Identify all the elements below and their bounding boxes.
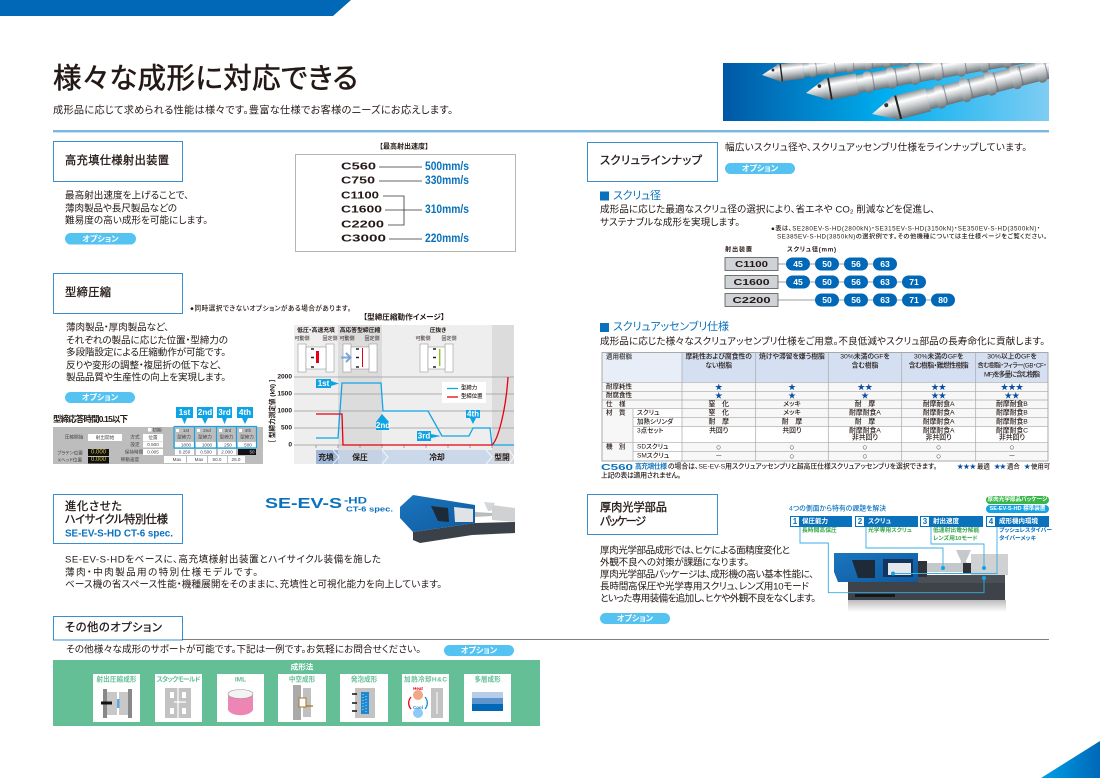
axis labels: 1000	[277, 408, 292, 414]
text: screw diameter description	[600, 204, 935, 228]
phase bar: 保圧	[352, 452, 368, 462]
card: hollow molding	[278, 674, 326, 722]
phase bar: 型開	[494, 452, 510, 462]
diameter chart: 射出装置	[725, 246, 752, 254]
chart: max injection speed: C750	[341, 176, 376, 186]
table: screw assembly specs: ★	[715, 391, 723, 400]
diagrams: mold states	[294, 326, 457, 372]
chart: max injection speed: C560	[341, 162, 377, 172]
text: lineup description: 幅広いスクリュ径や、スクリュアッセンブリ仕様をラインナップしています。	[725, 142, 1027, 154]
control panel screen: 移動速度	[121, 456, 140, 463]
package diagram: 1	[793, 517, 798, 526]
chart: max injection speed: 【最高射出速度】	[380, 142, 428, 150]
diameter chart: スクリュ径(mm)	[787, 246, 836, 254]
text: high filling description: 難易度の高い成形を可能にします。	[65, 214, 208, 226]
heading: other options: その他のオプション	[65, 621, 162, 634]
logo: SE-EV-S-HD: CT-6 spec.	[346, 506, 393, 514]
panel: screw lineup	[588, 142, 1051, 480]
step tabs: 1st	[179, 408, 191, 417]
control panel screen: 位置	[148, 434, 158, 441]
table: screw assembly specs: －	[1008, 452, 1016, 460]
table: screw assembly specs: 摩耗性および腐食性の	[686, 352, 752, 360]
table: screw assembly specs: 耐摩耐食B	[996, 399, 1028, 408]
subheading: screw assembly: スクリュアッセンブリ仕様	[613, 319, 729, 333]
chart: max injection speed: 330mm/s	[425, 175, 469, 187]
line: mold position	[316, 377, 508, 445]
package diagram: 4つの側面から特有の課題を解決	[789, 504, 886, 512]
title: 様々な成形に対応できる	[53, 63, 358, 95]
text: high-cycle description: 薄肉・中肉製品用の特別仕様モデルです。	[65, 566, 258, 578]
card: stack mold: スタックモールド	[156, 674, 200, 684]
control panel screen: 0.000	[91, 457, 107, 463]
table: screw assembly specs: 耐摩耐食A	[923, 399, 955, 408]
table: screw assembly specs: SDスクリュ	[637, 442, 669, 450]
table: screw assembly specs: 共回り	[782, 426, 802, 434]
subtitle: 成形品に応じて求められる性能は様々です。豊富な仕様でお客様のニーズにお応えします。	[53, 104, 453, 116]
control panel screen: Max	[195, 457, 204, 462]
step tabs: 4th	[239, 408, 251, 417]
text: other options description: その他様々な成形のサポートが可能です。下記は一例です。お気軽にお問合せください。	[66, 644, 421, 656]
diagrams: mold states: 圧抜き	[430, 326, 447, 334]
table: screw assembly specs: ★	[861, 391, 869, 400]
text: assembly description: 成形品に応じた様々なスクリュアッセンブリ仕様をご用意。不良低減やスクリュ部品の長寿命化に貢献します。	[600, 336, 1045, 348]
table: screw assembly specs: ★★	[858, 382, 873, 392]
table: screw assembly specs: 非共回り	[852, 432, 878, 442]
diameter chart: 71	[909, 277, 919, 287]
note	[771, 224, 1047, 240]
table footnote: 上記の表は適用されません。	[601, 470, 681, 480]
table: screw assembly specs: 耐 摩	[855, 399, 875, 408]
phase bar: 冷却	[429, 452, 445, 462]
diameter chart: 45	[793, 259, 803, 269]
table: screw assembly specs: ○	[936, 442, 941, 452]
package diagram: 3	[923, 517, 928, 526]
control panel screen: 方式	[130, 434, 140, 440]
heading: high filling	[54, 142, 182, 182]
package diagram: プッシュレスタイバー	[999, 526, 1052, 534]
package diagram: 低速射出電分解能	[933, 526, 980, 534]
molding methods panel	[53, 660, 540, 726]
phase bar	[316, 450, 514, 464]
option pill	[444, 645, 514, 656]
package diagram: 厚肉光学部品パッケージ	[988, 495, 1048, 503]
diagrams: mold states: 固定側	[322, 335, 338, 342]
control panel screen: 1st	[183, 428, 190, 433]
table: screw assembly specs: 3点セット	[637, 426, 663, 434]
table: screw assembly specs: スクリュ	[637, 409, 660, 417]
heading: mold compression: 型締圧縮	[65, 285, 111, 299]
package diagram: 長時間高保圧	[802, 526, 837, 534]
card: injection compression	[93, 674, 140, 722]
diameter chart: 63	[880, 277, 890, 287]
legend: 型締位置	[461, 392, 483, 400]
axis labels: 1500	[277, 390, 292, 398]
table: screw assembly specs: 30%未満のGFを	[840, 352, 890, 360]
machine photo	[400, 495, 515, 543]
control panel screen: 型締力	[177, 434, 191, 440]
panel: thick optical parts	[588, 494, 1052, 624]
card: multi-layer	[464, 674, 511, 722]
diameter chart: 50	[822, 277, 832, 287]
chart: max injection speed: C1600	[341, 204, 383, 216]
diagrams: mold states: 固定側	[441, 335, 457, 342]
table: screw assembly specs: ○	[716, 442, 721, 452]
heading: high-cycle spec: ハイサイクル特別仕様	[65, 512, 168, 526]
diameter chart: 50	[822, 295, 832, 305]
axis labels	[268, 374, 292, 448]
option pill: オプション	[742, 164, 778, 173]
text: mold compression description: 薄肉製品・厚肉製品など、	[66, 322, 169, 334]
option pill: オプション	[82, 393, 118, 402]
table: screw assembly specs: ★★	[931, 391, 947, 400]
star legend: ★★★	[957, 464, 977, 470]
option pill: オプション	[82, 234, 119, 244]
table: screw assembly specs: ○	[1009, 442, 1015, 452]
line: mold force	[316, 383, 514, 445]
heading: mold compression	[54, 274, 182, 314]
control panel screen: 50.0	[213, 457, 222, 462]
package diagram: 保圧能力	[802, 516, 828, 525]
diameter chart: 63	[880, 295, 890, 305]
table: screw assembly specs: MF)を多量に含む樹脂	[984, 370, 1040, 378]
panel: mold compression	[53, 274, 514, 464]
panel: other options	[53, 616, 1049, 726]
card: heat and cool: Heat	[413, 686, 423, 691]
card: heat and cool: 加熱冷却H&C	[404, 674, 447, 684]
axis labels: 500	[281, 424, 292, 432]
text: screw diameter description: 成形品に応じた最適なスクリュ径の選択により、省エネや CO₂ 削減などを促進し、	[600, 204, 935, 216]
note: SE385EV-S-HD(3850kN)の選択例です。その他機種については主仕様ページをご覧ください。	[777, 232, 1047, 240]
table: screw assembly specs: 材 質	[606, 408, 626, 417]
package diagram: タイバーメッキ	[999, 534, 1036, 542]
text: mold compression description	[66, 322, 228, 384]
control panel screen: 500	[244, 442, 252, 448]
card: foam molding	[340, 674, 388, 722]
table: screw assembly specs: 耐摩耐食B	[996, 417, 1028, 426]
card: IML	[217, 674, 264, 722]
table: screw assembly specs: ★	[788, 382, 796, 392]
text: optical description: 厚肉光学部品成形では、ヒケによる面精度変化と	[600, 544, 790, 556]
step tabs: 2nd	[198, 408, 212, 417]
diameter chart	[725, 246, 955, 306]
star legend	[957, 462, 1051, 470]
diameter chart: 45	[793, 277, 803, 287]
table: screw assembly specs: ○	[789, 442, 795, 452]
diagrams: mold states: 固定側	[364, 335, 380, 342]
text: optical description: といった専用装備を追加し、ヒケや外観不良をなくします。	[600, 592, 816, 604]
machine	[834, 550, 1008, 612]
text: optical description: 外観不良への対策が課題になります。	[600, 556, 749, 568]
card: injection compression: 射出圧縮成形	[96, 674, 137, 684]
heading: thick optical parts	[588, 494, 718, 534]
option pill: オプション	[617, 614, 653, 623]
chart: max injection speed: 220mm/s	[425, 233, 469, 245]
step tabs: 3rd	[218, 408, 231, 417]
card: heat and cool: Cool	[413, 705, 423, 710]
card: stack mold	[155, 674, 202, 722]
heading: high filling: 高充填仕様射出装置	[65, 153, 169, 167]
control panel screen: 初期	[152, 426, 162, 434]
chart callouts: 1st	[318, 379, 330, 388]
table footnote: の場合は、SE-EV-S用スクリュアッセンブリと超高圧仕様スクリュアッセンブリを選択できます。	[668, 462, 937, 470]
text: high-cycle description: ベース機の省スペース性能・機種展開をそのままに、充填性と可視化能力を向上しています。	[65, 578, 442, 590]
table: screw assembly specs: 仕 様	[606, 399, 626, 408]
table: screw assembly specs: ○	[936, 451, 941, 461]
control panel screen: 型締力	[198, 434, 212, 440]
option pill	[600, 613, 670, 624]
package diagram: 光学専用スクリュ	[868, 526, 912, 534]
table: screw assembly specs: 30%未満のGFを	[914, 352, 964, 360]
package diagram: レンズ用10モード	[933, 534, 978, 542]
package diagram: 成形機内環境	[999, 516, 1038, 525]
star legend: 最適	[977, 462, 990, 470]
table: screw assembly specs: 窒 化	[709, 399, 729, 408]
table: screw assembly specs: 含む樹脂・難燃性樹脂	[909, 360, 969, 370]
option pill	[65, 392, 135, 403]
control panel screen: 圧縮開始	[65, 434, 84, 440]
table: screw assembly specs: 耐 摩	[782, 417, 802, 426]
chart: max injection speed: C2200	[341, 220, 385, 230]
diameter chart: 71	[909, 295, 919, 305]
table: screw assembly specs: 耐摩耐食A	[923, 417, 955, 426]
star legend: 使用可	[1031, 462, 1051, 470]
table: screw assembly specs: 耐摩耐食A	[849, 408, 881, 417]
banner: screws photo	[723, 63, 1049, 121]
text: optical description: 厚肉光学部品パッケージは、成形機の高い基本性能に、	[600, 568, 814, 580]
table: screw assembly specs: ○	[789, 451, 795, 461]
table: screw assembly specs: 共回り	[709, 426, 728, 434]
package diagram: 2	[858, 517, 863, 526]
table: screw assembly specs: 機 別	[606, 442, 626, 450]
panel: high filling injection	[54, 142, 516, 252]
table: screw assembly specs: 耐腐食性	[606, 390, 632, 399]
chart callouts: 4th	[467, 410, 479, 418]
table: screw assembly specs: ★★★	[1001, 382, 1024, 392]
table: screw assembly specs: 耐 摩	[855, 417, 875, 426]
table: screw assembly specs: 30%以上のGFを	[987, 352, 1037, 360]
text: mold compression description: それぞれの製品に応じた位置・型締力の	[66, 334, 228, 346]
table footnote: 高充填仕様	[635, 462, 667, 470]
bottom corner accent	[1041, 741, 1100, 778]
diameter chart: 56	[851, 259, 861, 269]
table: screw assembly specs: 耐摩耐食B	[996, 408, 1028, 417]
package diagram: スクリュ	[868, 516, 891, 525]
control panel screen: 1800	[181, 442, 192, 448]
table: screw assembly specs: 非共回り	[999, 432, 1025, 442]
table footnote	[601, 462, 937, 480]
control panel screen: Xヘッド位置	[58, 456, 82, 464]
chart callouts: 3rd	[418, 432, 430, 440]
table: screw assembly specs: 耐摩耐食A	[923, 426, 955, 434]
control panel screen: 0.000	[91, 450, 107, 456]
diameter chart: 63	[880, 259, 890, 269]
heading: high-cycle spec: 進化させた	[65, 500, 122, 513]
control panel screen: 3rd	[225, 428, 232, 433]
control panel screen: 保持時間	[125, 448, 144, 456]
table: screw assembly specs: 窒 化	[709, 408, 729, 417]
top corner bar	[0, 0, 351, 16]
text: high filling description	[65, 190, 208, 226]
note: ●同時選択できないオプションがある場合があります。	[190, 304, 351, 312]
step tabs	[176, 407, 253, 424]
legend: 型締力	[461, 384, 477, 392]
table: screw assembly specs: ★	[788, 391, 796, 400]
legend	[442, 382, 486, 403]
chart callouts: 2nd	[376, 421, 390, 430]
table: screw assembly specs: 耐 摩	[709, 417, 729, 426]
package diagram: 4	[989, 517, 994, 526]
table: screw assembly specs: 加熱シリンダ	[637, 417, 674, 426]
control panel screen: 0.250	[179, 450, 191, 454]
table: screw assembly specs: 含む樹脂・フィラー(GB・CF・	[978, 362, 1046, 370]
package diagram: 射出速度	[933, 516, 960, 525]
table: screw assembly specs: ない樹脂	[705, 360, 732, 370]
diameter chart: C1600	[734, 277, 770, 287]
option pill	[725, 163, 795, 174]
control panel screen	[53, 426, 263, 464]
control panel screen: Max	[173, 457, 182, 462]
control panel screen: 0.005	[147, 450, 159, 454]
card: heat and cool	[402, 674, 449, 722]
chart: max injection speed: 500mm/s	[425, 161, 469, 173]
control panel screen: プラテン位置	[57, 450, 83, 456]
star legend: ★★	[994, 464, 1007, 470]
card: hollow molding: 中空成形	[289, 674, 316, 684]
control panel screen: 25.0	[232, 457, 241, 462]
text: high filling description: 最高射出速度を上げることで、	[65, 190, 189, 202]
table: screw assembly specs: 耐摩耗性	[606, 382, 632, 390]
option pill	[65, 233, 136, 244]
axis labels: 0	[288, 442, 292, 448]
text: mold compression description: 製品品質や生産性の向上を実現します。	[66, 372, 226, 384]
diagrams: mold states: 可動側	[294, 335, 310, 342]
text: screw diameter description: サステナブルな成形を実現します。	[600, 216, 740, 228]
star legend: ★	[1024, 464, 1031, 470]
axis labels: ［ 型締力測定値 (kN) ］	[268, 379, 276, 443]
axis labels: 2000	[277, 374, 292, 380]
diameter chart: 56	[851, 295, 861, 305]
table: screw assembly specs: 焼けや滞留を嫌う樹脂	[759, 352, 825, 360]
table: screw assembly specs: 適用樹脂	[606, 352, 632, 360]
molding methods panel: 成形法	[291, 662, 314, 672]
heading: screw lineup	[588, 142, 718, 182]
header rule	[53, 130, 1049, 132]
chart callouts	[316, 379, 480, 441]
text: mold compression description: 反りや変形の調整・複屈折の低下など、	[66, 360, 222, 372]
table: screw assembly specs: 耐摩耐食A	[923, 408, 955, 417]
table: screw assembly specs: メッキ	[783, 410, 801, 417]
callout lines	[800, 527, 997, 593]
chart: max injection speed: C3000	[341, 234, 387, 244]
text: optical description	[600, 544, 816, 604]
table: screw assembly specs: ★★	[1004, 391, 1020, 400]
table: screw assembly specs: 耐摩耐食C	[996, 426, 1028, 434]
control panel screen: 射出開始	[96, 434, 115, 441]
diagrams: mold states: 可動側	[415, 335, 431, 342]
diagrams: mold states: 可動側	[339, 335, 355, 342]
phase bar: 充填	[318, 452, 334, 462]
text: optical description: 長時間高保圧や光学専用スクリュ、レンズ用10モード	[600, 580, 809, 592]
control panel screen: 型締力	[220, 434, 234, 440]
subheading: screw diameter: スクリュ径	[613, 189, 661, 202]
diagrams: mold states: 低圧・高速充填	[297, 326, 335, 334]
text: high-cycle description	[65, 554, 442, 590]
control panel screen: 設定	[130, 441, 140, 448]
logo: SE-EV-S-HD: -HD	[344, 496, 368, 506]
heading: screw lineup: スクリュラインナップ	[600, 154, 702, 167]
control panel screen: 1000	[202, 442, 213, 448]
control panel screen: 250	[224, 442, 232, 448]
table: screw assembly specs: ★	[715, 382, 723, 392]
diameter chart: 80	[938, 295, 948, 305]
card: multi-layer: 多層成形	[474, 674, 501, 684]
heading: thick optical parts: パッケージ	[600, 515, 646, 528]
package diagram: SE-EV-S-HD 標準装置	[990, 504, 1046, 512]
panel: high-cycle spec	[54, 494, 515, 590]
chart: max injection speed: C1100	[341, 190, 380, 202]
diameter chart: 50	[822, 259, 832, 269]
package diagram	[789, 495, 1052, 612]
text: high-cycle description: SE-EV-S-HDをベースに、高充填様射出装置とハイサイクル装備を施した	[65, 554, 381, 566]
note: ●表は、SE280EV-S-HD(2800kN)・SE315EV-S-HD(3150kN)・SE350EV-S-HD(3500kN)・	[771, 224, 1040, 232]
logo: SE-EV-S-HD: SE-EV-S	[265, 495, 342, 512]
chart: max injection speed: 310mm/s	[425, 204, 469, 216]
text: mold compression description: 多段階設定による圧縮動作が可能です。	[66, 346, 226, 358]
chart: max injection speed	[296, 142, 516, 252]
table: screw assembly specs: －	[715, 452, 722, 460]
table: screw assembly specs: 非共回り	[926, 432, 952, 442]
control panel screen: 0.500	[200, 450, 212, 454]
control panel screen: 2.000	[221, 450, 233, 454]
table footnote: C560	[601, 462, 633, 472]
response time label: 型締応答時間0.15以下	[53, 414, 128, 424]
control panel screen: 4th	[245, 428, 252, 433]
heading: thick optical parts: 厚肉光学部品	[600, 500, 667, 514]
table: screw assembly specs: メッキ	[783, 401, 801, 408]
heading: high-cycle spec: SE-EV-S-HD CT-6 spec.	[65, 528, 173, 540]
chart: mold compression image: 【型締圧縮動作イメージ】	[363, 312, 445, 322]
table: screw assembly specs: 耐摩耐食A	[849, 426, 881, 434]
control panel screen: 50	[249, 450, 255, 454]
card: IML: IML	[235, 676, 246, 684]
chart: mold compression image	[268, 312, 514, 464]
diagrams: mold states: 高応答型締圧縮	[340, 326, 380, 334]
text: high filling description: 薄肉製品や長尺製品などの	[65, 202, 177, 214]
table: screw assembly specs: ★★	[931, 382, 947, 392]
card: foam molding: 発泡成形	[351, 674, 378, 684]
table: screw assembly specs: ○	[862, 451, 868, 461]
table: screw assembly specs: 含む樹脂	[852, 360, 879, 370]
diameter chart: C1100	[735, 259, 768, 269]
star legend: 適合	[1007, 462, 1020, 470]
control panel screen: 型締力	[240, 434, 254, 440]
diameter chart: 56	[851, 277, 861, 287]
control panel screen: 2nd	[203, 428, 211, 433]
option pill: オプション	[461, 646, 497, 655]
logo: SE-EV-S-HD	[265, 495, 393, 514]
heading: high-cycle spec	[54, 494, 182, 544]
table: screw assembly specs: ○	[862, 442, 868, 452]
control panel screen: 0.500	[147, 442, 159, 447]
heading: other options	[54, 616, 182, 640]
diameter chart: C2200	[732, 295, 771, 305]
table: screw assembly specs	[602, 352, 1048, 461]
table: screw assembly specs: SMスクリュ	[637, 452, 669, 460]
